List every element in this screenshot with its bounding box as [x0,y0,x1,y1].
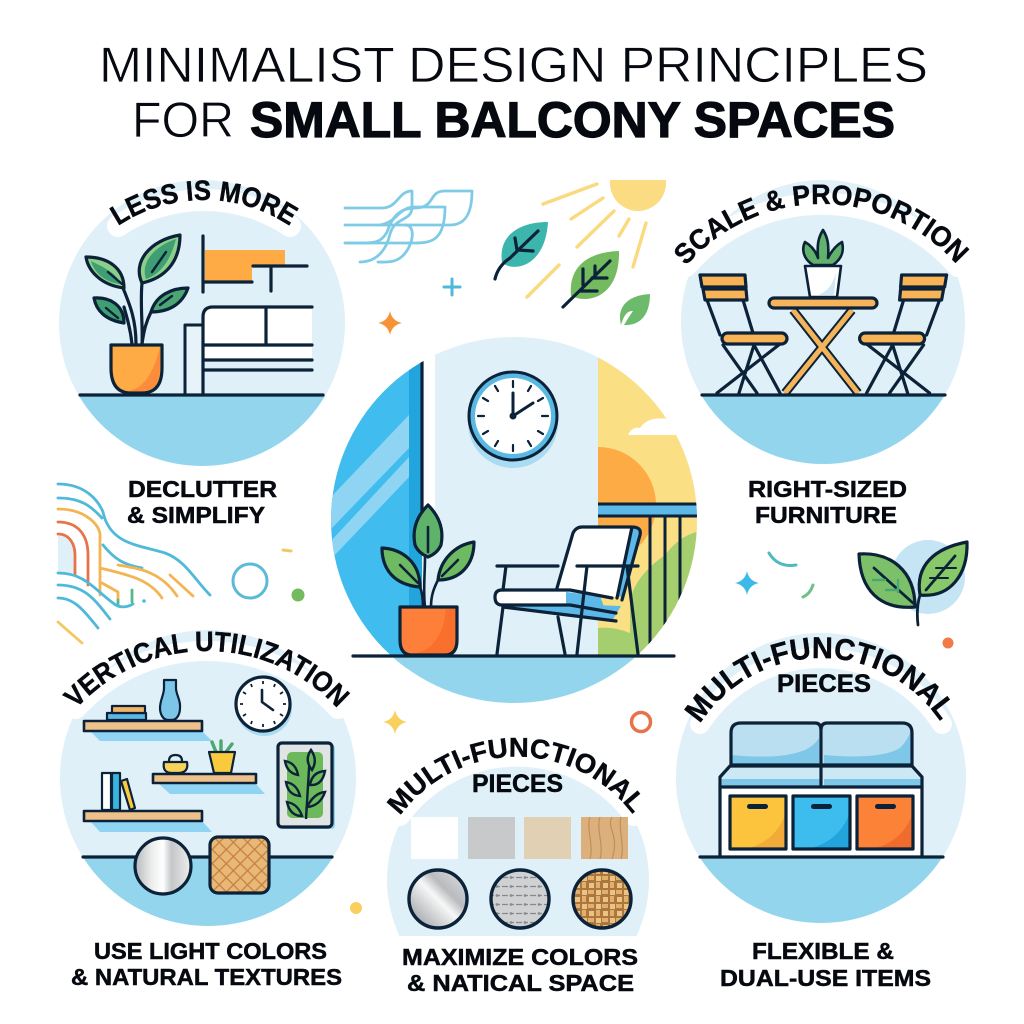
icon: shelf with orange art [203,236,307,292]
caption: declutter & simplify [127,476,277,528]
panel: scale and proportion [674,180,970,464]
decoration: colorful wave lines [58,484,210,643]
icon: top shelf with books and vase [84,680,212,741]
decoration: flowing wind lines [345,191,472,262]
title: SMALL BALCONY SPACES [250,92,895,148]
icon: potted plant [86,235,188,393]
panel: vertical utilization [60,630,356,926]
caption: declutter & simplify: DECLUTTER [128,476,277,502]
icon: wall clock [468,372,558,468]
decoration: right sparkle and arcs [735,553,813,597]
floor line [353,654,674,658]
floor line [700,855,943,859]
icon: orange star [378,311,402,335]
icon: potted plant [382,505,474,655]
icon: green leaf [563,251,619,307]
heading: multi-functional: MULTI-FUNCTIONAL [684,637,950,722]
icon: left folding chair [700,275,787,393]
caption: declutter & simplify: & SIMPLIFY [127,502,265,528]
decoration: orange ring [632,712,650,732]
decoration: yellow star [383,710,407,734]
icon: teal leaf [495,222,548,279]
decoration: orange dot [942,638,954,648]
subheading: pieces: PIECES [777,670,871,698]
subheading: pieces: PIECES [472,770,563,798]
heading: multi-functional: MULTI-FUNCTIONAL [386,738,640,815]
caption: maximize colors: & NATICAL SPACE [407,970,634,996]
caption: use light colors: & NATURAL TEXTURES [71,964,342,990]
icon: sun with rays [527,180,666,297]
icon: small leaf [620,294,650,325]
glass door [330,337,435,667]
heading: vertical utilization: VERTICAL UTILIZATION [62,631,350,708]
floor line [702,393,945,397]
icon: plant on table [803,230,843,297]
icon: living wall frame [278,743,335,829]
balcony view with sun, hills and railing [598,358,697,667]
title: MINIMALIST DESIGN PRINCIPLES [99,37,928,93]
icon: bench cushions [720,723,922,787]
caption: flexible and dual-use items: FLEXIBLE & [752,938,894,964]
icon: woven panel [210,837,269,893]
caption: maximize colors [402,944,638,996]
heading: less is more: LESS IS MORE [109,180,299,226]
material circles [409,870,631,928]
panel: material swatches [386,738,649,936]
panel: central balcony scene [330,337,708,707]
icon: right folding chair [860,275,947,393]
icon: round mirror [135,838,191,894]
floor line [80,393,323,397]
caption: use light colors: USE LIGHT COLORS [94,938,327,964]
swatch row [411,817,628,859]
icon: lower shelf with books [84,773,212,832]
caption: right-sized furniture [748,476,907,528]
icon: storage base with bins [720,787,922,857]
caption: right-sized furniture: FURNITURE [755,502,897,528]
title [99,37,928,148]
decoration: yellow dot [350,902,362,914]
caption: maximize colors: MAXIMIZE COLORS [402,944,638,970]
icon: bistro table [769,298,877,393]
icon: middle shelf with bowl and plant [153,741,265,794]
floor line [83,855,332,859]
icon: plus sparkle [444,279,460,295]
caption: flexible and dual-use items: DUAL-USE ITEMS [720,965,931,991]
decoration: ring and dots left [142,550,304,603]
icon: sofa [185,307,312,395]
icon: wall clock [236,677,292,736]
heading: scale and proportion: SCALE & PROPORTION [674,184,970,264]
icon: twin leaves on blue disc [859,540,967,625]
caption: flexible and dual-use items [720,938,931,991]
panel: multi-functional storage bench [676,633,966,923]
caption: right-sized furniture: RIGHT-SIZED [748,476,907,502]
title: FOR [132,92,234,148]
caption: use light colors [71,938,342,990]
icon: armchair [495,527,641,654]
panel: less is more [59,180,345,466]
